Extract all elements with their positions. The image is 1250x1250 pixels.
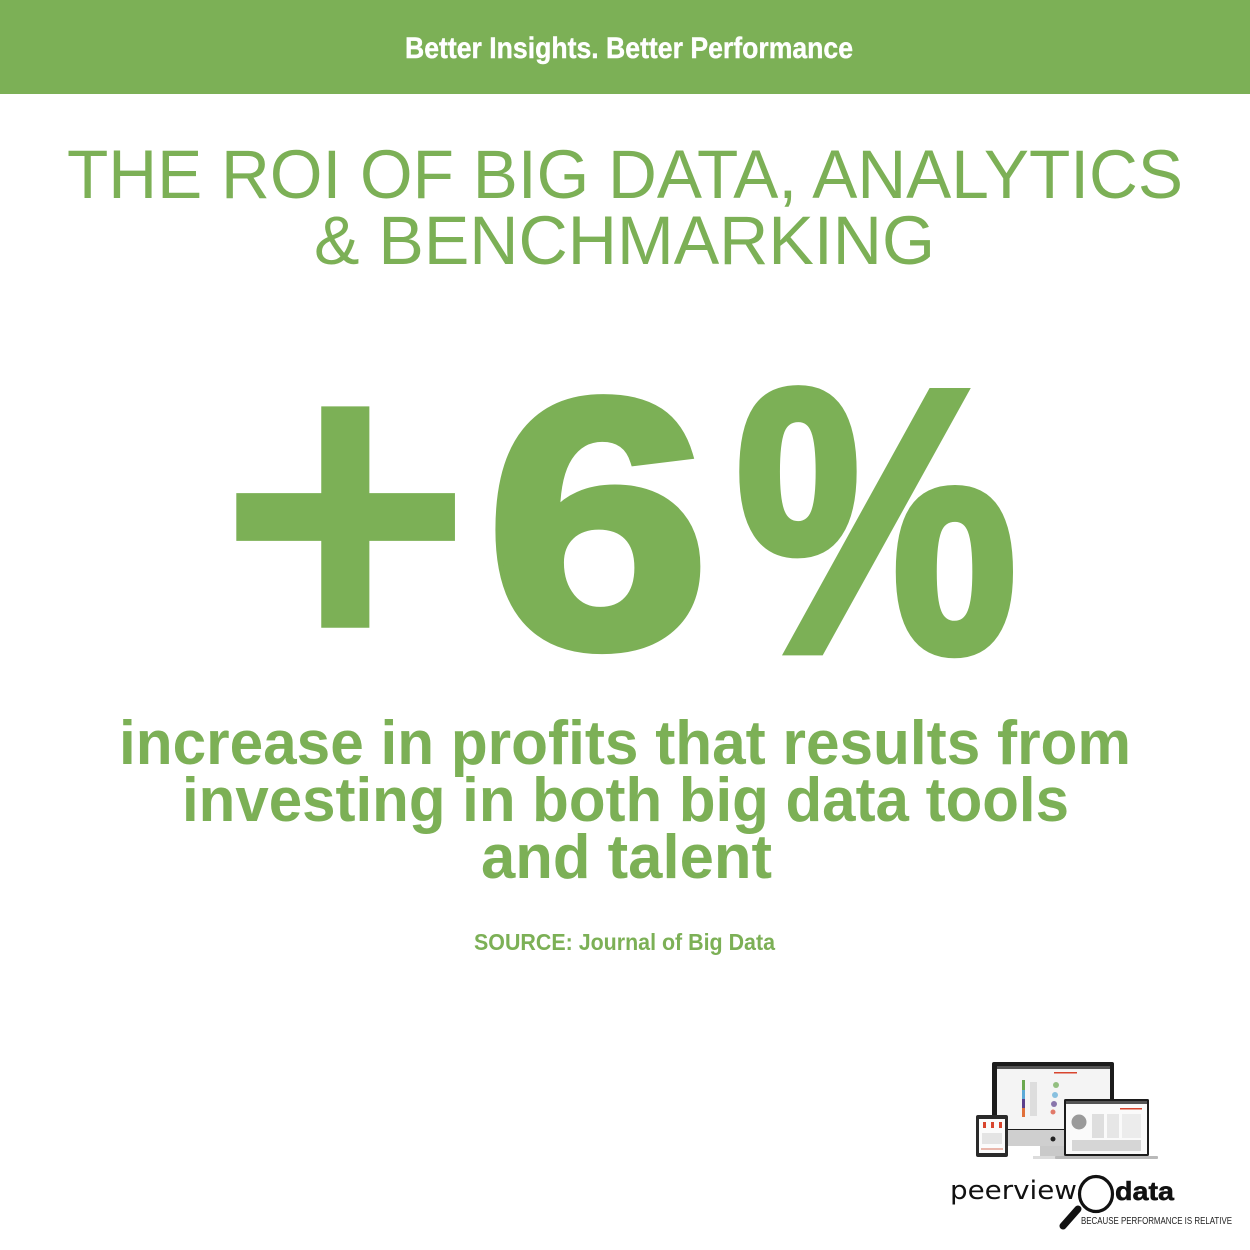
title: THE ROI OF BIG DATA, ANALYTICS (67, 136, 1183, 213)
big statistic: +6%: 6 (486, 326, 710, 722)
icon: laptop (1055, 1099, 1158, 1159)
title: & BENCHMARKING (314, 202, 935, 279)
header banner (0, 0, 1250, 94)
big statistic: +6%: + (218, 268, 473, 755)
icon: desktop monitor (992, 1062, 1114, 1159)
logo: device mockups (976, 1062, 1158, 1159)
icon: tablet (976, 1115, 1008, 1157)
description text: and talent (481, 823, 772, 892)
description text (119, 709, 1131, 892)
big statistic: +6% (218, 268, 1018, 755)
description text: increase in profits that results from (119, 709, 1131, 778)
header banner: Better Insights. Better Performance (405, 32, 853, 65)
logo wordmark: data (1115, 1176, 1175, 1206)
icon: magnifying glass (1063, 1176, 1112, 1226)
logo wordmark (950, 1176, 1232, 1227)
title (67, 136, 1183, 279)
logo wordmark: peerview (950, 1176, 1077, 1206)
source note: SOURCE: Journal of Big Data (474, 929, 775, 955)
big statistic: +6%: % (735, 311, 1018, 731)
description text: investing in both big data tools (182, 766, 1069, 835)
